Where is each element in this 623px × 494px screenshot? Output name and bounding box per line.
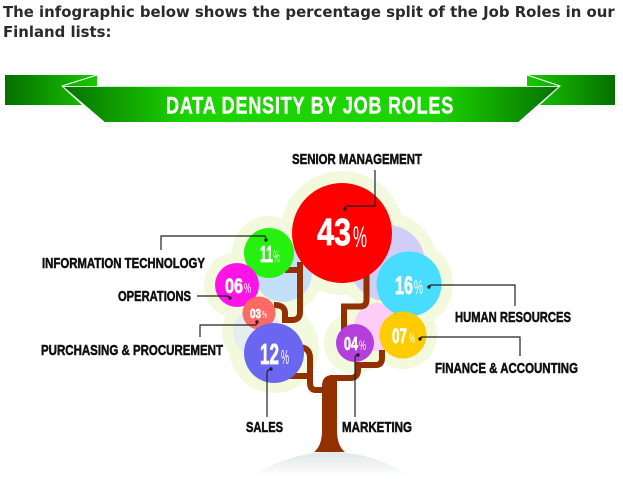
label: purchasing and procurement: PURCHASING & PROCUREMENT	[41, 342, 223, 359]
circle: finance 07%: %	[409, 330, 415, 346]
label: information technology: INFORMATION TECHNOLOGY	[42, 255, 205, 272]
pale accent circles	[233, 225, 425, 356]
label: senior management: SENIOR MANAGEMENT	[292, 151, 422, 168]
circle: information technology 11%	[244, 228, 294, 278]
label: marketing: MARKETING	[342, 419, 412, 436]
label: finance and accounting: FINANCE & ACCOUNTING	[435, 360, 578, 377]
circle: senior management 43%: 43	[317, 212, 351, 254]
circle: information technology 11%: %	[273, 247, 280, 266]
circle: purchasing 03%: 03	[250, 306, 261, 321]
circle: marketing 04%: %	[359, 337, 366, 353]
intro text: The infographic below shows the percentage split of the Job Roles in our	[3, 3, 615, 21]
banner right tail	[527, 75, 615, 105]
intro text	[3, 3, 615, 41]
circle: information technology 11%: 11	[260, 241, 273, 267]
banner title: DATA DENSITY BY JOB ROLES	[166, 92, 454, 120]
circle: sales 12%	[244, 323, 304, 383]
circle: senior management 43%	[292, 183, 392, 283]
label: sales: SALES	[246, 419, 283, 436]
circle: marketing 04%	[336, 324, 374, 362]
banner left tail	[5, 75, 97, 105]
tree trunk and branches	[274, 262, 382, 452]
circle: human resources 16%: %	[414, 277, 423, 299]
circle: senior management 43%: %	[353, 221, 367, 254]
circle: operations 06%	[215, 263, 259, 307]
circle: purchasing 03%: %	[262, 310, 267, 321]
circle: human resources 16%	[376, 252, 442, 316]
circle: operations 06%: %	[244, 280, 251, 297]
leader lines	[161, 170, 520, 417]
banner	[5, 74, 615, 122]
halo backgrounds	[204, 171, 453, 393]
circle: finance 07%	[380, 312, 426, 358]
label: human resources: HUMAN RESOURCES	[455, 309, 571, 326]
circle: human resources 16%: 16	[395, 272, 413, 300]
ground mound	[252, 452, 412, 476]
banner main ribbon	[62, 87, 560, 122]
circle: finance 07%: 07	[392, 325, 407, 348]
label: operations: OPERATIONS	[118, 288, 191, 305]
circle: sales 12%: 12	[260, 339, 279, 371]
circle: operations 06%: 06	[225, 275, 243, 298]
circle: sales 12%: %	[281, 347, 289, 369]
intro text: Finland lists:	[3, 23, 111, 41]
circle: marketing 04%: 04	[344, 334, 358, 354]
circle: purchasing 03%	[242, 296, 276, 330]
